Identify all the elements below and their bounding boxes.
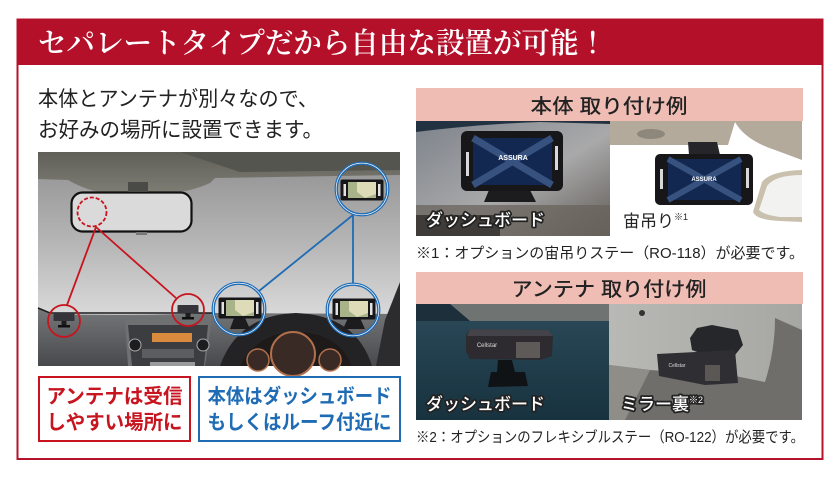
- photo: antenna on dashboard: [416, 304, 609, 420]
- panel: unit mounting examples: [416, 88, 804, 262]
- photo: unit on dashboard: [416, 121, 610, 236]
- intro text: お好みの場所に設置できます。: [38, 119, 323, 142]
- photo label: 宙吊り: [623, 212, 674, 231]
- ceiling: [38, 152, 400, 195]
- photo: antenna on dashboard: Cellstar: [477, 343, 497, 349]
- photo label: ※1: [674, 212, 688, 222]
- callout: antenna placement: [39, 377, 190, 441]
- photo: antenna behind mirror: [609, 304, 802, 420]
- heading: antenna mounting: [416, 272, 803, 304]
- title bar: セパレートタイプだから自由な設置が可能！: [38, 21, 607, 62]
- heading: unit mounting: [416, 88, 803, 121]
- steering wheel and gauges: [220, 313, 372, 366]
- red connector lines: [67, 227, 176, 305]
- callout: unit placement: もしくはルーフ付近に: [208, 411, 392, 434]
- photo label: ダッシュボード: [426, 394, 545, 414]
- antenna location: left: [48, 305, 80, 337]
- intro text: 本体とアンテナが別々なので、: [38, 88, 318, 111]
- blue connector lines: [259, 215, 353, 291]
- footnote 2: ※2：オプションのフレキシブルステー（RO-122）が必要です。: [416, 428, 804, 446]
- intro text: [38, 88, 323, 142]
- callout: antenna placement: しやすい場所に: [46, 411, 182, 434]
- footnote 1: ※1：オプションの宙吊りステー（RO-118）が必要です。: [416, 245, 804, 262]
- photo label: ※2: [689, 395, 703, 405]
- callout: antenna placement: アンテナは受信: [46, 385, 182, 408]
- title bar: [17, 19, 823, 65]
- panel: antenna mounting examples: [416, 272, 804, 446]
- panel: car interior scene: [38, 152, 400, 376]
- dashed circle on mirror: [78, 198, 106, 226]
- dashboard: [38, 308, 400, 366]
- callout: unit placement: [199, 377, 400, 441]
- photo: unit on visor: [610, 121, 802, 236]
- center console: [125, 318, 212, 366]
- heading: unit mounting: 本体 取り付け例: [530, 95, 688, 118]
- unit location: dash right: [326, 283, 380, 337]
- heading: antenna mounting: アンテナ 取り付け例: [512, 278, 706, 301]
- unit location: dash left: [212, 282, 266, 336]
- photo label: ミラー裏: [621, 395, 689, 414]
- photo: unit on visor: ASSURA: [691, 177, 717, 183]
- photo: unit on dashboard: ASSURA: [498, 155, 528, 162]
- unit location: roof: [335, 162, 389, 216]
- photo label: ダッシュボード: [426, 210, 545, 230]
- photo: antenna behind mirror: Cellstar: [669, 363, 686, 369]
- antenna location: centre: [172, 294, 204, 326]
- callout: unit placement: 本体はダッシュボード: [208, 384, 392, 408]
- mirror: [72, 192, 192, 232]
